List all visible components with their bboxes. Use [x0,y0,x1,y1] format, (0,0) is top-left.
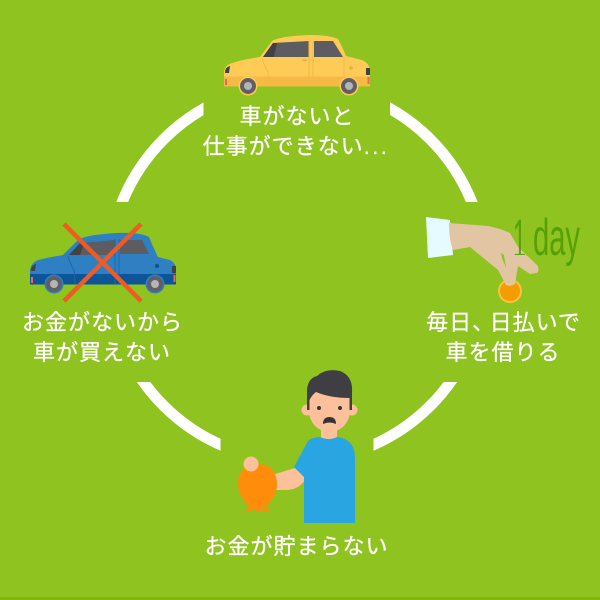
neck [321,425,337,442]
text: 1day: 1 [513,207,526,270]
text: left label: 車が買えない [33,340,171,365]
text: right label [426,310,581,365]
icon: man holding piggy bank [238,370,358,523]
arm [272,468,306,490]
text: left label [22,310,183,365]
piggy bank [238,464,277,512]
cycle arcs [116,102,478,451]
shirt [294,437,355,523]
text: top label [203,104,389,159]
ears and face [302,404,312,416]
icon: red cross [64,224,141,301]
text: right label: 車を借りる [445,340,561,365]
moustache [323,417,336,424]
cuff [426,217,453,258]
icon: yellow car [224,35,370,96]
hand [244,456,258,472]
text: left label: お金がないから [22,310,183,335]
text: top label: 車がないと [239,104,355,129]
hair [307,370,352,410]
icon: hand dropping coin [426,217,580,303]
eyes [317,406,321,410]
text: 1day [514,218,580,266]
hand [449,223,538,286]
icon: blue car crossed out [30,224,176,301]
text: right label: 毎日、日払いで [426,310,581,335]
icon: coin [498,279,522,303]
text: bottom label: お金が貯まらない [204,534,389,559]
text: top label: 仕事ができない... [203,134,389,159]
